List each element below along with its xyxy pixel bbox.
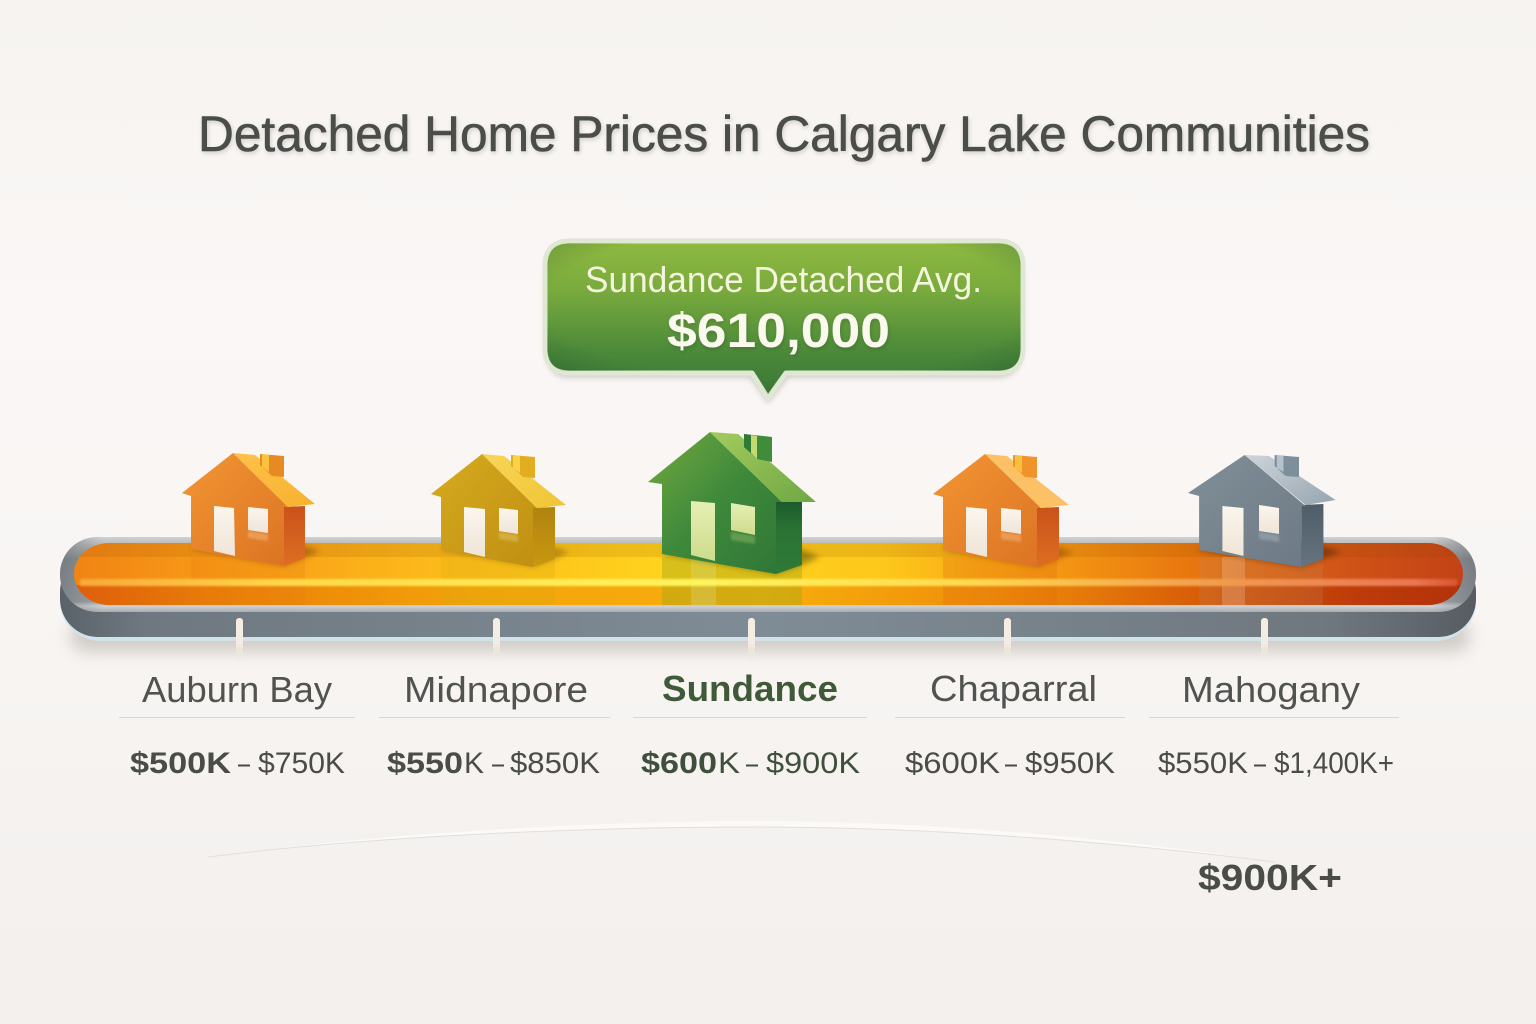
community name: Mahogany (1182, 669, 1360, 710)
price range: K (464, 747, 484, 780)
price range (130, 747, 345, 780)
price range: $950K (1025, 747, 1115, 780)
glass tube (74, 543, 1463, 606)
community name: Chaparral (930, 668, 1097, 709)
bar rim (60, 537, 1476, 612)
price range (905, 747, 1115, 780)
price range: – (1254, 747, 1266, 780)
price range (641, 747, 860, 780)
extra price label: $900K+ (1198, 857, 1342, 898)
icon: house Mahogany (1188, 455, 1341, 567)
bar base (60, 556, 1476, 641)
icon: house Chaparral (933, 454, 1073, 567)
column: Auburn Bay (119, 669, 355, 780)
house reflections (228, 558, 305, 578)
callout label: Sundance Detached Avg. (585, 259, 982, 300)
column: Mahogany (1149, 669, 1399, 780)
column: Midnapore (379, 669, 610, 780)
icon: house Auburn Bay (182, 453, 320, 566)
price range: – (238, 747, 250, 780)
icon: house Midnapore (431, 454, 569, 567)
decorative ground curve (208, 821, 1275, 862)
price range: – (746, 747, 758, 780)
price range: $550 (387, 747, 463, 780)
callout: Sundance average (545, 241, 1023, 404)
price range: $550K (1158, 747, 1248, 780)
community name: Auburn Bay (142, 669, 332, 710)
column: Chaparral (895, 668, 1125, 780)
price range: – (492, 747, 504, 780)
price range: $600K (905, 747, 1000, 780)
price bar (60, 537, 1476, 660)
community name: Midnapore (404, 669, 588, 710)
price range: $600 (641, 747, 717, 780)
price range: K (718, 747, 740, 780)
price range (1158, 747, 1394, 780)
tick marks (236, 618, 1268, 660)
price range: $500K (130, 747, 231, 780)
column: Sundance (633, 668, 867, 780)
callout value: $610,000 (667, 305, 890, 358)
price range: $750K (258, 747, 345, 780)
bar shadow (70, 620, 1470, 652)
price range: $850K (510, 747, 600, 780)
price range: $900K (766, 747, 860, 780)
price range: $1,400K+ (1274, 747, 1394, 780)
price range: – (1005, 747, 1017, 780)
title: Detached Home Prices in Calgary Lake Communities (198, 106, 1370, 162)
icon: house Sundance (648, 432, 820, 574)
price range (387, 747, 600, 780)
community name: Sundance (662, 668, 838, 709)
